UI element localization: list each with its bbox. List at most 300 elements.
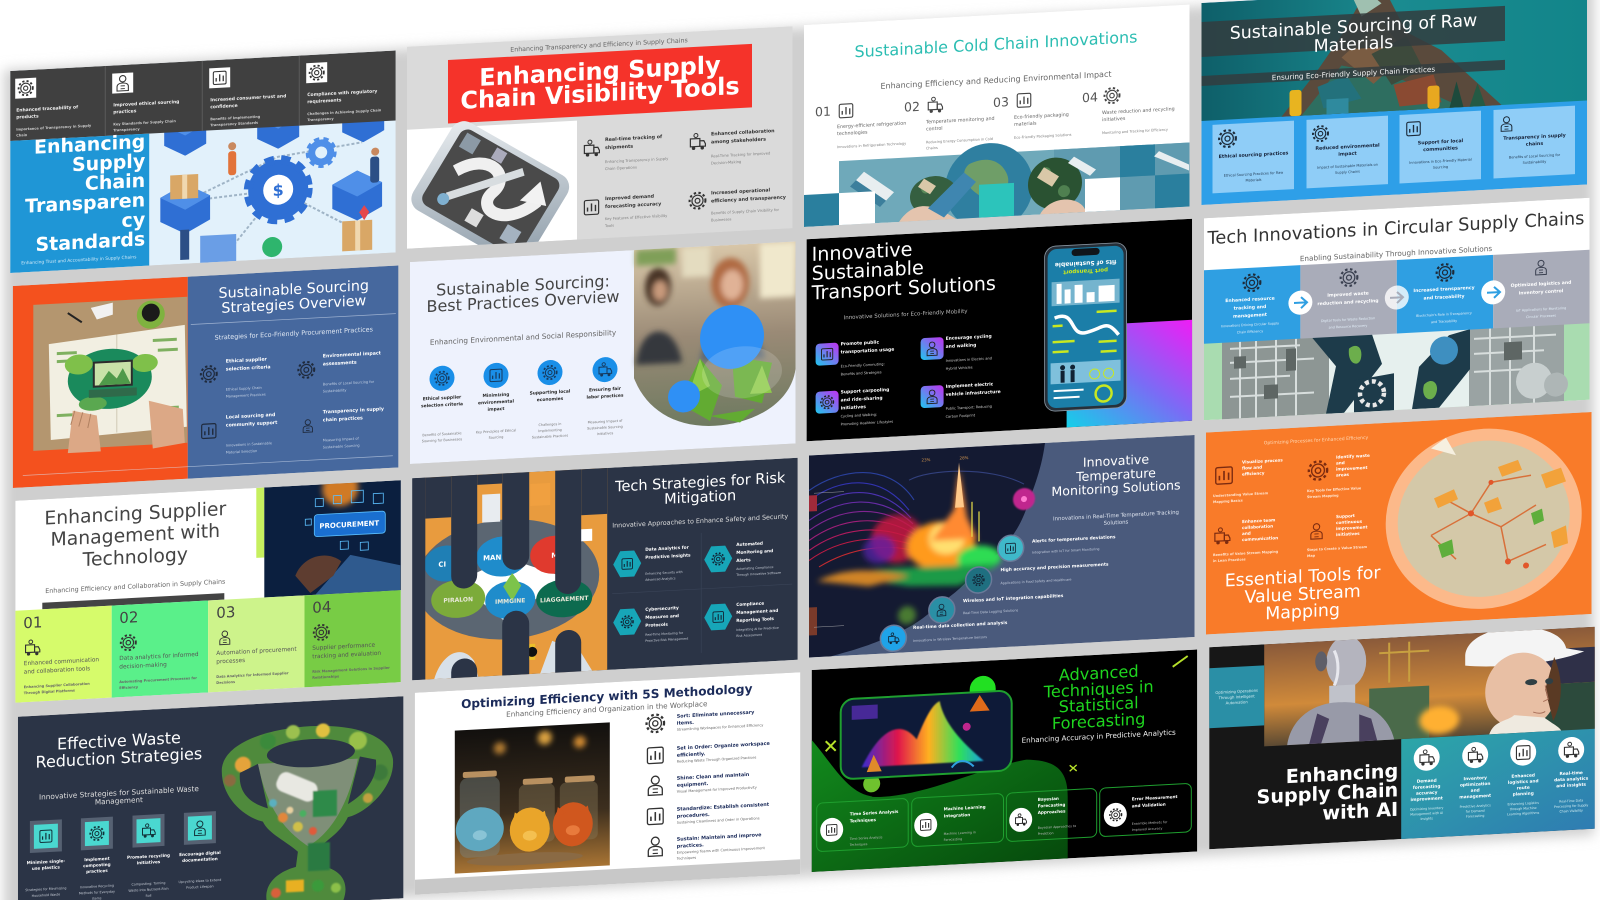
gradient block [1067, 320, 1193, 427]
practice icons: Minimizing [483, 392, 509, 399]
subtitle: Enhancing Efficiency and Collaboration in Supply Chains [45, 577, 226, 595]
header strip: Chain [16, 133, 28, 138]
benefit cards: Reduced environmental [1315, 143, 1380, 152]
tool items: efficiency [1242, 470, 1265, 477]
waste strategies: Minimize single- [27, 858, 65, 865]
header strip: Key Standards for Supply Chain [113, 119, 176, 127]
benefit cards: Transparency in supply [1503, 133, 1567, 142]
AI benefits panel: data analytics [1554, 776, 1589, 783]
illustration: metallic supply chain tray [407, 120, 577, 249]
5S list: Techniques [676, 856, 696, 861]
four benefit columns: inventory control [1519, 288, 1564, 297]
subtitle: Optimizing Processes for Enhanced Efficiency [1264, 435, 1369, 446]
image: meeting table with concept ellipses: LIAGGAEMENT [540, 595, 589, 605]
AI benefits panel: through Machine [1510, 806, 1537, 811]
four benefit columns: Innovations Driving Circular Supply [1221, 321, 1279, 328]
four benefit columns: and traceability [1424, 293, 1464, 302]
header strip: Challenges in Achieving Supply Chain [307, 108, 382, 116]
slide 11: Innovative Temperature Monitoring Solutions [809, 435, 1194, 658]
subtitle: Innovative Strategies for Sustainable Waste [39, 784, 199, 802]
title: Monitoring Solutions [1051, 477, 1181, 499]
tool items: Understanding Value Stream [1213, 491, 1269, 498]
waste strategies: composting [83, 862, 111, 868]
AI benefits panel: for Demand [1466, 809, 1485, 814]
image: rainbow heat terrain chart: 28% [960, 455, 969, 460]
illustration: gears and supply chain blocks [160, 121, 384, 263]
tool items: Mapping Basics [1213, 499, 1243, 504]
arrow connectors [1288, 280, 1505, 315]
waste strategies: Innovative Recycling [80, 884, 114, 889]
5S list: Sort: Eliminate unnecessary [677, 710, 755, 720]
slide 14: Optimizing Efficiency with 5S Methodology [415, 672, 800, 895]
features list: forecasting accuracy [605, 201, 662, 210]
title panel: Transparen [25, 189, 145, 218]
numbered items: Waste reduction and recycling [1102, 106, 1175, 116]
slide 4: Sustainable Sourcing of Raw Materials [1202, 0, 1587, 205]
AI benefits panel: Predictive Analytics [1460, 803, 1491, 809]
strategies grid: Automating Compliance [736, 565, 774, 571]
waste strategies: Promote recycling [127, 853, 170, 860]
four numbered columns: tracking and evaluation [312, 651, 381, 660]
four numbered columns: Efficiency [119, 685, 139, 690]
strategies grid: Measures and [645, 613, 679, 621]
tool items: Visualize process [1242, 457, 1283, 465]
tool items: and [1336, 460, 1345, 466]
tool items: Benefits of Value Stream Mapping [1213, 550, 1279, 557]
title [428, 276, 619, 312]
benefit cards: Materials [1245, 178, 1262, 183]
title banner: Enhancing Supply [479, 51, 721, 92]
solutions list: initiatives [841, 404, 866, 411]
numbered items: Energy-efficient refrigeration [837, 121, 906, 130]
waste strategies: Encourage digital [179, 850, 221, 857]
slide 9: Enhancing Supplier Management with Technology [15, 467, 401, 703]
practice icons: Supporting local [530, 388, 571, 397]
5S list [647, 709, 770, 862]
solutions list: Cycling and Walking: [841, 413, 877, 418]
features list: Enhancing Transparency in Supply [605, 157, 669, 164]
benefit cards: chains [1526, 141, 1543, 148]
illustration: pile of materials [1202, 0, 1587, 121]
benefit cards: Ethical Sourcing Practices for Raw [1224, 171, 1283, 178]
numbered items: 03 [993, 94, 1009, 110]
AI benefits panel: Real-Time Data [1559, 798, 1583, 804]
four numbered columns: 03 [216, 603, 235, 622]
title [1043, 661, 1154, 734]
AI benefits panel: Chain Visibility [1559, 808, 1583, 814]
four numbered columns: 02 [119, 608, 138, 627]
four benefit columns: Increased transparency [1413, 285, 1475, 294]
four numbered columns: 04 [312, 598, 331, 617]
features list: shipments [605, 144, 633, 151]
technique boxes: Bayesian [1038, 796, 1059, 802]
image: robot and engineer at port [1264, 623, 1595, 746]
four numbered columns: Risk Management Solutions in Supplier [312, 666, 390, 674]
5S list: Standardize: Establish consistent [677, 802, 770, 813]
tagline box [1209, 665, 1264, 728]
header strip: Benefits of Implementing [210, 115, 261, 121]
tool items: areas [1336, 472, 1350, 478]
strategies list: Management Practices [226, 393, 266, 399]
solutions list: Promoting Healthier Lifestyles [841, 420, 893, 426]
practice icons: Challenges in [539, 422, 561, 427]
title: Management with [51, 521, 220, 551]
AI benefits panel: Inventory [1464, 775, 1487, 782]
image: rainbow heat terrain chart [809, 443, 1045, 658]
practice icons: impact [488, 406, 504, 413]
image: rainbow heat terrain chart: 23% [922, 457, 931, 463]
technique boxes: Time Series Analysis [849, 835, 883, 841]
technique boxes: Approaches [1038, 808, 1066, 815]
title: Sustainable [812, 256, 924, 285]
slide 6: Sustainable Sourcing Best Practices Overview [410, 241, 796, 464]
5S list: practices. [677, 842, 704, 850]
slide 7: Innovative Sustainable Transport Solutions [807, 219, 1193, 441]
benefit cards: Supply Chains [1335, 170, 1360, 175]
solutions list: Benefits and Strategies [841, 370, 882, 376]
header strip: Transparency [307, 117, 334, 122]
slide 10: Tech Strategies for Risk Mitigation [412, 438, 798, 708]
solutions list: Support carpooling [841, 387, 889, 395]
tagline box: Through Intelligent [1218, 693, 1255, 700]
four benefit columns: Blockchain's Role in Transparency [1416, 311, 1472, 318]
strategies list: chain practices [323, 415, 363, 424]
title [219, 280, 368, 314]
subtitle: Enhancing Environmental and Social Responsibility [430, 328, 617, 347]
title: Tech Strategies for Risk [614, 470, 786, 496]
tool items [1213, 453, 1370, 563]
slide 15: Advanced Techniques in Statistical Forecasting [812, 649, 1197, 872]
technique boxes: Techniques [849, 842, 868, 847]
features list: among stakeholders [711, 137, 766, 146]
waste strategies: Strategies for Minimizing [25, 886, 66, 892]
numbered items: Monitoring and Tracking for Efficiency [1102, 128, 1168, 135]
practice icons: economies [537, 396, 564, 403]
title: Enhancing Supplier [44, 499, 226, 530]
strategies list: Environmental impact [323, 350, 382, 360]
strategies grid: Reporting Tools [736, 616, 774, 624]
dark overlay capsules [412, 448, 607, 708]
practice icons [421, 356, 624, 445]
subtitle [1053, 510, 1179, 530]
image: meeting table with concept ellipses [415, 468, 607, 680]
illustration: globe in hands with logistics [839, 142, 1190, 225]
monitoring items: Alerts for temperature deviations [1032, 534, 1116, 545]
benefit cards: Sourcing [1433, 165, 1448, 170]
title: Optimizing Efficiency with 5S Methodology [461, 682, 753, 711]
slide 2: Enhancing Supply Chain Visibility Tools [407, 26, 792, 249]
title [1257, 759, 1398, 828]
four benefit columns: Enhanced resource [1225, 296, 1275, 304]
5S list: Visual Management for Improved Productivity [677, 786, 757, 794]
four benefit columns: IoT Applications for Monitoring [1516, 306, 1566, 313]
AI benefits panel: improvement [1411, 795, 1443, 803]
AI benefits panel: optimization [1460, 781, 1490, 788]
monitoring items: Applications in Food Safety and Healthcare [1000, 578, 1071, 585]
solutions list: vehicle infrastructure [946, 389, 1001, 398]
title bands: Ensuring Eco-Friendly Supply Chain Practices [1272, 65, 1435, 82]
features list: Benefits of Supply Chain Visibility for [711, 208, 780, 216]
title [44, 499, 226, 573]
strategies list: Benefits of Local Sourcing for [323, 380, 375, 387]
four numbered columns: Through Digital Platforms [24, 689, 75, 695]
AI benefits panel: forecasting [1413, 783, 1440, 791]
5S list: Reducing Waste Through Organized Practices [677, 756, 757, 764]
features list: Key Features of Effective Visibility [605, 214, 668, 221]
title [812, 242, 995, 301]
strategies list: Ethical Supply Chain [226, 386, 262, 392]
5S list: Empowering Teams with Continuous Improvement [677, 846, 765, 855]
practice icons: Initiatives [597, 431, 614, 436]
solutions list: Innovations in Electric and [946, 356, 992, 363]
title: Value Stream [1244, 582, 1361, 608]
subtitle: Management [95, 795, 143, 807]
AI benefits panel: Enhanced [1511, 772, 1535, 780]
technique boxes: Bayesian Approaches to [1038, 824, 1076, 830]
illustration: circular machinery [1204, 323, 1590, 420]
title: Sustainable Sourcing [219, 278, 369, 302]
waste strategies: Household Waste [32, 892, 60, 898]
title: Supply Chain [1257, 778, 1398, 809]
practice icons: environmental [478, 398, 514, 406]
four numbered columns: Automating Procurement Processes for [119, 676, 197, 684]
subtitle: Strategies for Eco-Friendly Procurement Practices [215, 325, 374, 342]
phone mockup with infographic: fits of Sustainable [1055, 258, 1116, 268]
title [614, 470, 786, 511]
title: Innovative [812, 238, 912, 266]
four benefit columns: Improved waste [1327, 291, 1369, 299]
AI benefits panel: Enhancing Logistics [1507, 801, 1539, 806]
title: Advanced [1059, 662, 1139, 685]
solutions list: Promote public [841, 339, 879, 347]
strategies list: community support [226, 420, 278, 429]
practice icons: Sustainable Sourcing [587, 425, 623, 431]
four benefit columns: Optimized logistics and [1511, 280, 1571, 289]
strategies list: assessments [323, 360, 357, 368]
subtitle: Innovative Solutions for Eco-Friendly Mobility [844, 309, 968, 321]
strategies grid: Real-Time Monitoring for [645, 631, 684, 637]
strategies grid: Risk Assessment [736, 633, 763, 638]
four numbered columns: Enhanced communication [24, 657, 99, 667]
waste strategies: Composting: Turning [132, 881, 165, 887]
tool items: Map [1307, 554, 1316, 558]
title: Techniques in [1043, 677, 1154, 702]
strategies grid: Automated [736, 541, 763, 548]
numbered items: materials [1014, 121, 1037, 128]
title [36, 727, 202, 772]
technique boxes [817, 783, 1191, 852]
header strip: Compliance with regulatory [307, 88, 377, 98]
benefit cards [1212, 106, 1575, 193]
header strip: requirements [307, 97, 342, 105]
subtitle: Enhancing Efficiency and Organization in the Workplace [506, 699, 708, 719]
monitoring items [880, 530, 1116, 652]
solutions list: Public Transport: Reducing [946, 404, 992, 411]
title banner [448, 44, 752, 124]
numbered items: Eco-Friendly Packaging Solutions [1014, 133, 1072, 140]
AI benefits panel: Insights [1420, 816, 1433, 821]
numbered items: initiatives [1102, 116, 1126, 123]
strategies grid: Compliance [736, 601, 764, 608]
strategies list: Sustainable Sourcing [323, 444, 360, 450]
5S list: Shine: Clean and maintain [677, 772, 750, 782]
title: Best Practices Overview [426, 287, 620, 316]
5S list: efficiently. [677, 751, 706, 759]
strategies grid: Integrating AI for Predictive [736, 626, 779, 632]
title: Tech Innovations in Circular Supply Chains [1207, 208, 1584, 249]
four numbered columns: Automation of procurement [216, 647, 297, 657]
subtitle: Enhancing Accuracy in Predictive Analytics [1022, 728, 1176, 745]
title banner: Chain Visibility Tools [460, 72, 740, 115]
header strip: Increased consumer trust and [210, 93, 286, 103]
slide 1: Enhancing Supply Chain Transparency Standards [10, 50, 396, 273]
title: Effective Waste [57, 728, 181, 754]
numbered items: control [926, 126, 943, 133]
monitoring items: High accuracy and precision measurements [1000, 562, 1109, 573]
accents [826, 656, 1188, 784]
four numbered columns: processes [216, 658, 245, 666]
benefit cards: Benefits of Local Sourcing for [1509, 153, 1561, 160]
technique boxes: Techniques [850, 817, 877, 823]
subtitle: Innovations in Real-Time Temperature Tracking [1053, 510, 1179, 523]
monitoring items: Real-time data collection and analysis [913, 620, 1008, 631]
title: with AI [1322, 798, 1398, 825]
technique boxes: Improved Accuracy [1132, 826, 1162, 832]
solutions list: Implement electric [946, 381, 994, 390]
four benefit columns: Chain Efficiency [1237, 329, 1263, 335]
5S list: items. [677, 720, 694, 727]
four numbered columns: decision-making [119, 662, 167, 671]
title bands [1202, 6, 1505, 86]
slide 5: Sustainable Sourcing Strategies Overview [13, 265, 399, 488]
numbered items [816, 87, 1174, 150]
numbered items: Innovations in Refrigeration Technology [837, 142, 906, 149]
title panel: Standards [35, 228, 145, 256]
tool items: Stream Mapping [1307, 493, 1339, 499]
numbered items: 01 [815, 104, 831, 119]
technique boxes: Prediction [1038, 831, 1054, 836]
four numbered columns: Enhancing Supplier Collaboration [24, 682, 90, 689]
header strip: Improved ethical sourcing [113, 99, 179, 109]
four numbered columns [15, 590, 401, 703]
tool items: communication [1242, 535, 1278, 542]
solutions list: transportation usage [841, 347, 894, 355]
features list: Improved demand [605, 194, 655, 202]
waste strategies: documentation [182, 856, 218, 863]
solutions list [816, 333, 1001, 428]
four benefit columns: and Traceability [1431, 319, 1457, 324]
technique boxes: and Validation [1132, 802, 1166, 808]
header strip: Enhanced traceability of [16, 104, 78, 114]
AI benefits panel: accuracy [1416, 790, 1438, 797]
strategies grid: Cybersecurity [645, 605, 679, 613]
5S list: Sustain: Maintain and improve [677, 832, 762, 843]
title: Forecasting [1052, 709, 1145, 733]
footer band [415, 859, 800, 895]
slide 13: Effective Waste Reduction Strategies [18, 696, 403, 900]
four numbered columns: Relationships [312, 674, 339, 680]
title: Technology [82, 545, 188, 571]
monitoring items: Real-Time Data Logging Solutions [963, 608, 1019, 615]
strategies list: Ethical supplier [226, 356, 268, 365]
features list: Tools [604, 224, 614, 228]
AI benefits panel: Optimizing Inventory [1410, 806, 1444, 812]
features list: Chain Operations [605, 165, 637, 171]
lime accent bar [256, 487, 264, 558]
title panel: cy [122, 209, 146, 232]
strategies grid: Proactive Risk Management [645, 637, 689, 643]
tagline box: Optimizing Operations [1215, 688, 1258, 695]
strategies list: Material Selection [226, 449, 257, 455]
features list [584, 127, 787, 229]
numbered items: 02 [904, 99, 920, 115]
5S list: procedures. [677, 812, 710, 820]
illustration: gears and supply chain blocks: $ [273, 180, 284, 200]
title bands: Sustainable Sourcing of Raw [1230, 11, 1477, 44]
title: Strategies Overview [221, 293, 366, 317]
waste strategies [25, 811, 221, 900]
strategies list [201, 350, 384, 456]
phone mockup with infographic: port Transport [1063, 266, 1108, 275]
solutions list: Carbon Footprint [946, 413, 976, 419]
waste strategies: Waste into Nutrient-Rich [128, 887, 169, 893]
strategies grid: Predictive Insights [645, 552, 691, 561]
tool items: Support [1336, 513, 1355, 519]
AI benefits panel: planning [1513, 791, 1534, 798]
title: Mitigation [664, 488, 736, 508]
header strip [10, 50, 396, 141]
technique boxes: Machine Learning in [944, 830, 976, 836]
benefit cards: Innovations in Eco-Friendly Material [1409, 158, 1472, 165]
header strip: Transparency [113, 127, 140, 133]
numbered items: Eco-friendly packaging [1014, 112, 1069, 121]
practice icons: Ethical supplier [423, 394, 462, 402]
title bands: Materials [1314, 33, 1393, 57]
AI benefits panel: Demand [1417, 778, 1437, 785]
tool items: improvement [1336, 465, 1367, 472]
features list: Decision-Making [711, 160, 741, 166]
title [1051, 450, 1181, 499]
benefit cards: communities [1423, 145, 1458, 153]
title panel: Supply [72, 150, 146, 176]
strategies grid: Advanced Analytics [645, 576, 676, 582]
image: procurement dashboard on laptop [264, 467, 401, 597]
practice icons: Benefits of Sustainable [422, 431, 462, 437]
monitoring items: Integration with IoT for Smart Monitoring [1032, 547, 1099, 555]
image: meeting table with concept ellipses: MAN [483, 554, 501, 563]
practice icons: Sourcing [489, 435, 503, 440]
image: piggy banks in jars [455, 722, 610, 874]
solutions list: Hybrid Vehicles [946, 365, 973, 371]
strategies list: Sustainability [323, 388, 346, 394]
waste strategies: Methods for Everyday [79, 890, 115, 895]
strategies list: Measuring Impact of [323, 437, 359, 443]
four numbered columns: 01 [23, 613, 42, 632]
slide 12: Essential Tools for Value Stream Mapping [1206, 412, 1592, 634]
subtitle: Enhancing Transparency and Efficiency in Supply Chains [510, 37, 688, 54]
benefit cards: Ethical sourcing practices [1219, 150, 1288, 160]
numbered items: Temperature monitoring and [925, 116, 995, 126]
technique boxes: Ensemble Methods for [1132, 820, 1168, 826]
AI benefits panel: Management with AI [1410, 811, 1443, 817]
title: Reduction Strategies [36, 744, 202, 772]
circular map image [1386, 424, 1582, 614]
numbered items: technologies [837, 130, 868, 137]
technique boxes: Integration [944, 812, 970, 818]
black wave under monitor [872, 744, 1035, 797]
technique boxes: Machine Learning [944, 804, 986, 811]
subtitle: Enhancing Efficiency and Reducing Environmental Impact [881, 70, 1111, 91]
